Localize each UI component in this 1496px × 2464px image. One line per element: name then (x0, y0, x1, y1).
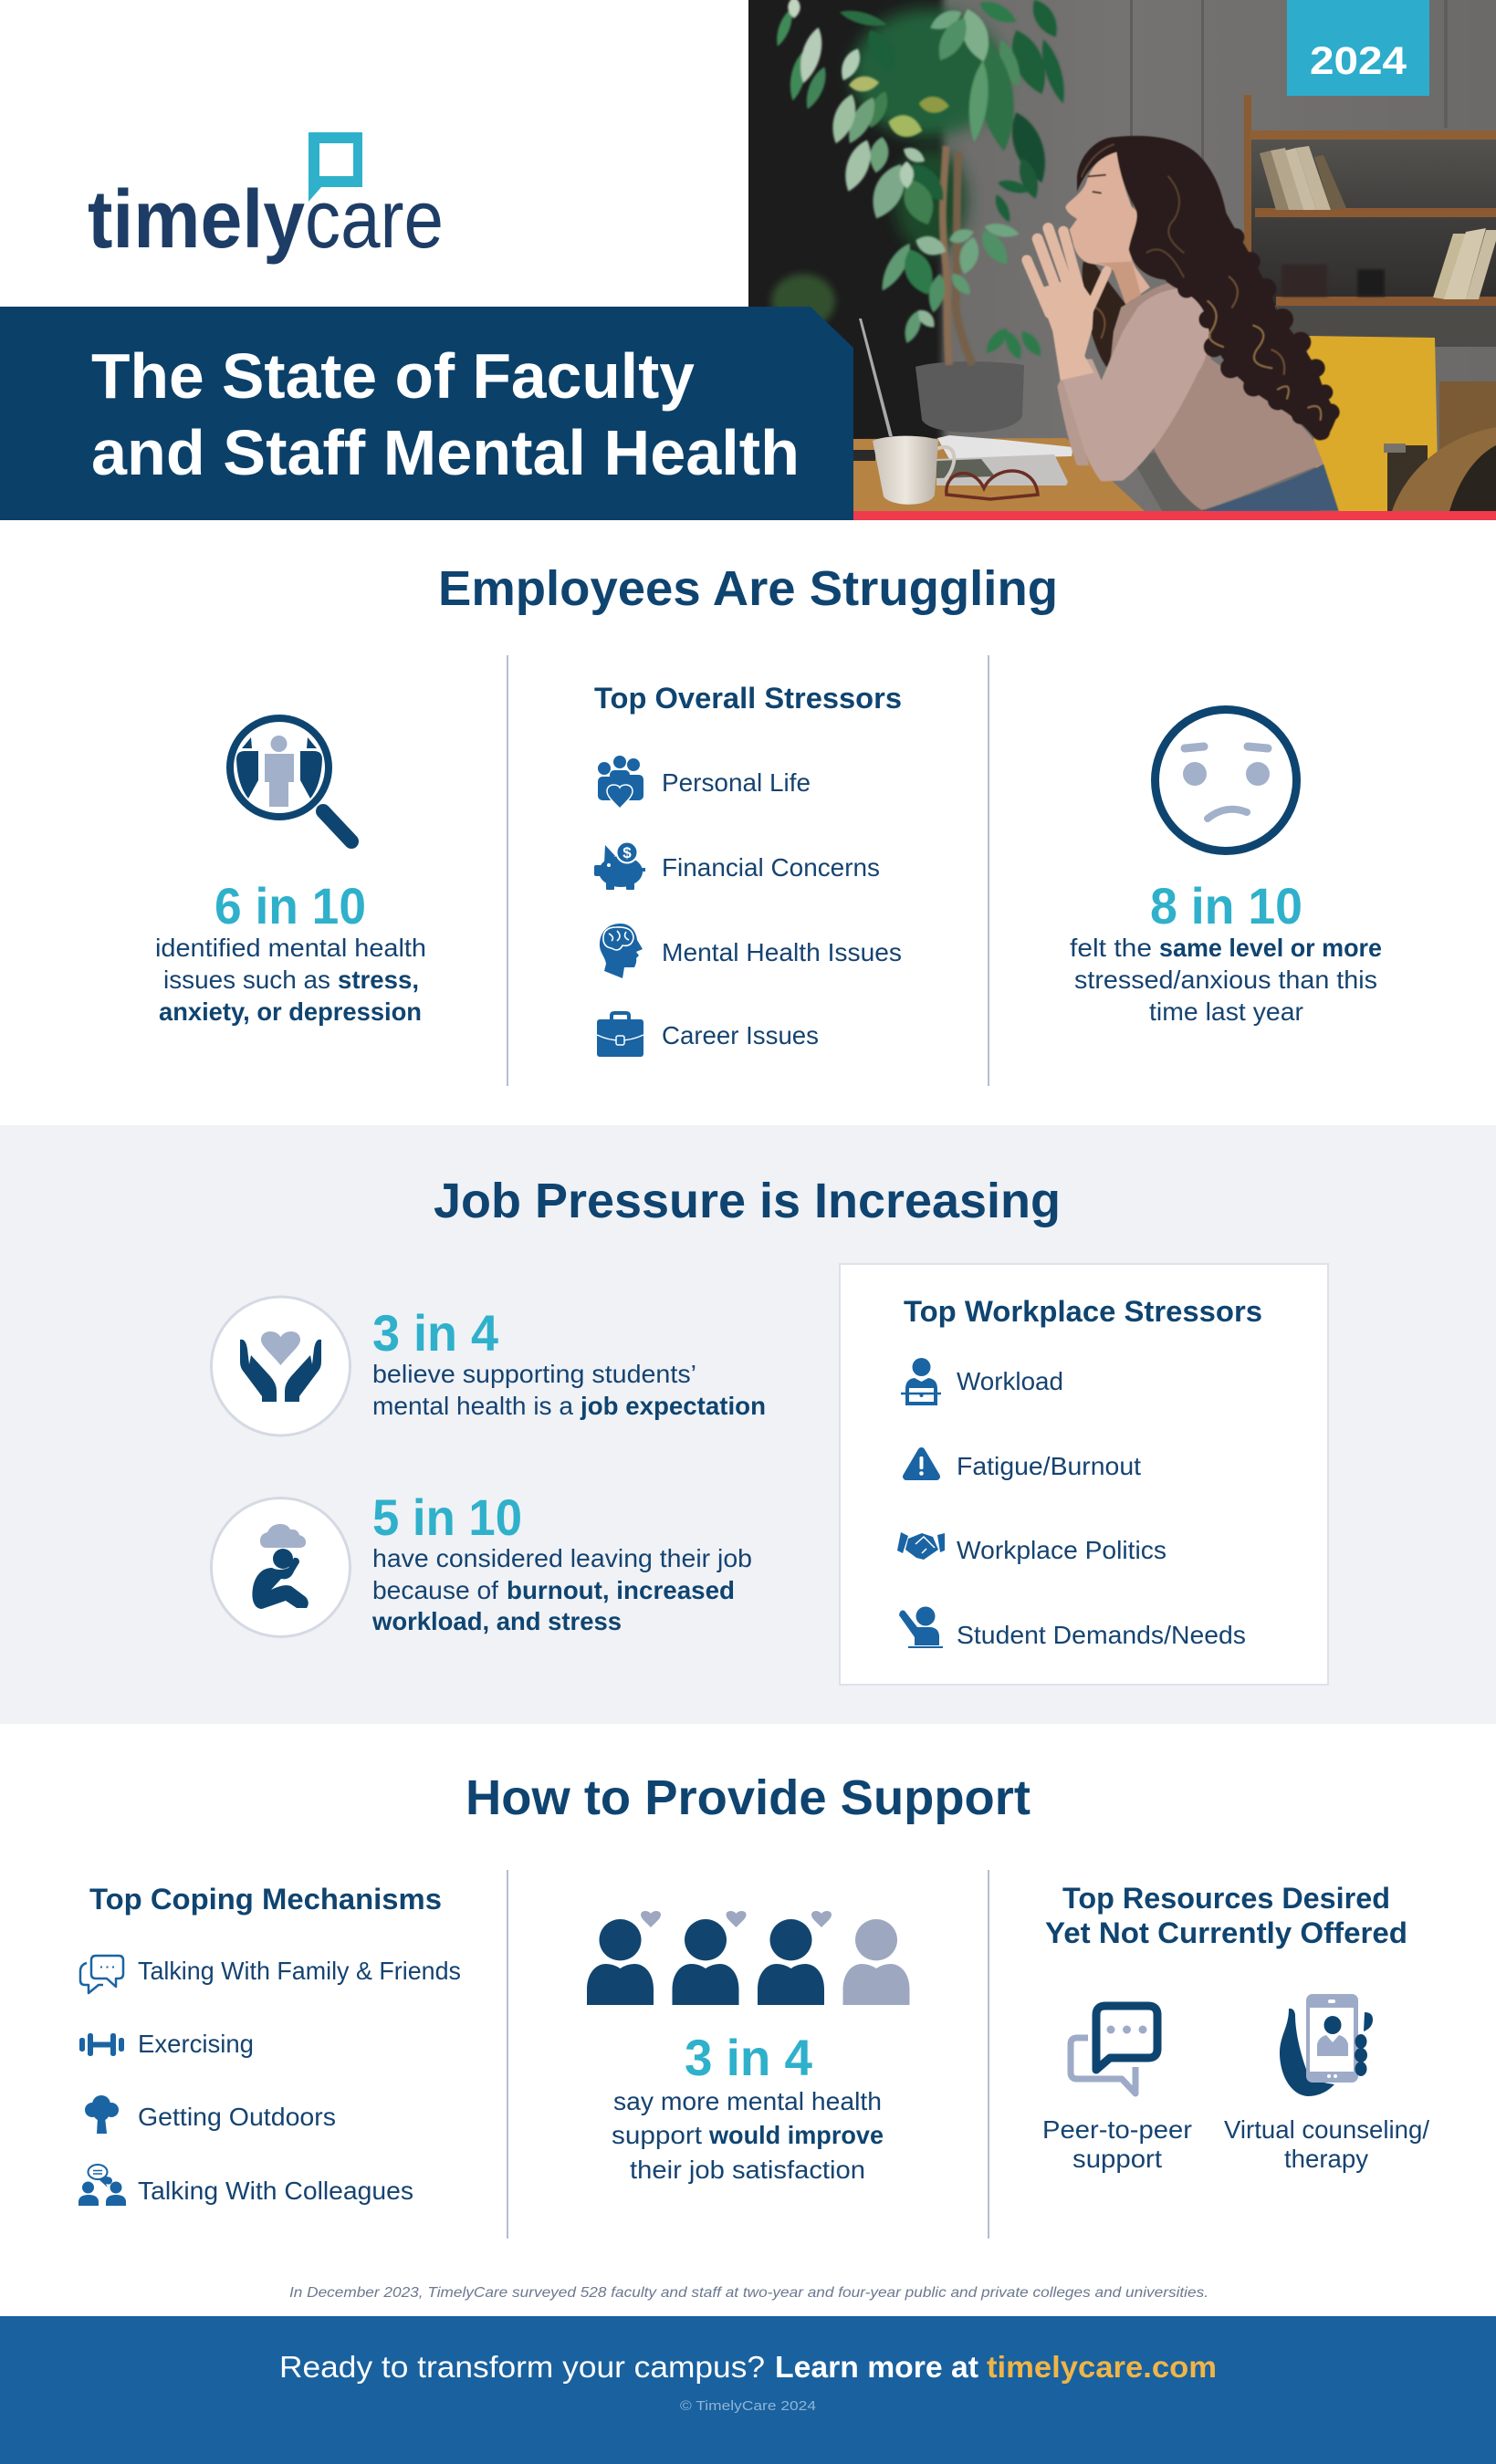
copyright: © TimelyCare 2024 (680, 2398, 816, 2414)
yellow chair and cabinet (1306, 336, 1496, 511)
icon: person under cloud (212, 1498, 350, 1637)
laptop (859, 318, 1073, 485)
icon: head with brain (600, 924, 643, 978)
panel: how to provide support (78, 1770, 1429, 2206)
label: student demands: Student Demands/Needs (957, 1621, 1246, 1649)
icon: worried face (1156, 710, 1296, 851)
card: top workplace stressors (840, 1264, 1328, 1685)
stat text: would improve (708, 2121, 884, 2149)
badge box (1287, 0, 1429, 96)
stat number: 5 in 10 (372, 1488, 522, 1546)
logo word: timely: timely (88, 174, 305, 266)
panel: employees are struggling (155, 561, 1382, 1057)
plant (772, 0, 1071, 365)
stat: 5 in 10 considered leaving (212, 1488, 752, 1637)
icon: handshake (897, 1532, 945, 1560)
label: personal life: Personal Life (662, 768, 811, 797)
plant pot (915, 361, 1024, 433)
stat text: have considered leaving their job (372, 1544, 752, 1572)
badge year: 2024 (1310, 39, 1407, 83)
stat text: anxiety, or depression (159, 997, 422, 1026)
list heading: Top Coping Mechanisms (89, 1883, 442, 1916)
icon: briefcase (597, 1013, 643, 1057)
call to action bold: Learn more at (775, 2350, 978, 2384)
year badge (1287, 0, 1429, 96)
icon: magnifier over people (230, 718, 351, 841)
section heading: How to Provide Support (466, 1770, 1030, 1825)
label: support: support (1072, 2145, 1162, 2173)
stat text: workload, and stress (371, 1607, 622, 1635)
mug (873, 436, 954, 505)
top resources desired (1042, 1882, 1429, 2173)
label: getting outdoors: Getting Outdoors (138, 2103, 336, 2131)
website link: timelycare.com (987, 2350, 1217, 2384)
label: peer-to-peer: Peer-to-peer (1042, 2115, 1192, 2144)
banner shape (0, 307, 853, 520)
label: mental health issues: Mental Health Issues (662, 938, 902, 966)
stat text: stress, (338, 966, 419, 994)
label: exercising: Exercising (138, 2030, 254, 2058)
stat text: support (612, 2121, 702, 2149)
stat number: 6 in 10 (214, 877, 366, 934)
footer background (0, 2316, 1496, 2464)
icon: hands holding heart (212, 1297, 350, 1436)
title line 2: and Staff Mental Health (91, 417, 800, 488)
stat text: burnout, increased (507, 1576, 735, 1604)
icon: four people with hearts (587, 1911, 909, 2005)
icon: piggy bank (594, 841, 645, 890)
icon: workload (901, 1358, 941, 1405)
stat text: because of (372, 1576, 498, 1604)
icon: personal life (598, 756, 643, 809)
hair (1077, 136, 1340, 440)
stat text: say more mental health (613, 2087, 882, 2115)
footer (0, 2316, 1496, 2464)
heading line 1: Top Resources Desired (1062, 1882, 1390, 1915)
label: workplace politics: Workplace Politics (957, 1536, 1166, 1564)
hands (1027, 228, 1107, 317)
section heading: Job Pressure is Increasing (434, 1174, 1061, 1228)
icon: dumbbell (79, 2033, 124, 2056)
call to action lead: Ready to transform your campus? (279, 2350, 765, 2384)
icon: piggy bank: $ (622, 844, 632, 861)
icon: warning triangle (906, 1451, 936, 1477)
stat text (371, 1544, 752, 1635)
label: career issues: Career Issues (662, 1021, 819, 1049)
glasses (947, 471, 1038, 499)
heading line 2: Yet Not Currently Offered (1045, 1916, 1407, 1949)
stat text: their job satisfaction (630, 2156, 865, 2184)
stat text: job expectation (580, 1392, 766, 1420)
icon: speech bubbles (80, 1956, 123, 1993)
header photo: woman at desk (712, 0, 1496, 529)
hair behind neck (1083, 262, 1125, 368)
stat number: 3 in 4 (372, 1304, 498, 1362)
stat text: stressed/anxious than this (1074, 966, 1377, 994)
stat text: issues such as (163, 966, 330, 994)
icon: colleagues talking (78, 2165, 126, 2206)
stat number: 3 in 4 (685, 2029, 812, 2086)
stat text: same level or more (1159, 934, 1382, 962)
label: fatigue/burnout: Fatigue/Burnout (957, 1452, 1141, 1480)
label: talking with family: Talking With Family & Friends (138, 1957, 461, 1985)
icon: student with raised hand (899, 1606, 943, 1647)
red band (853, 511, 1496, 520)
label: workload: Workload (957, 1367, 1063, 1395)
sleeve (1062, 288, 1208, 481)
panel: job pressure is increasing (0, 1125, 1496, 1724)
title line 1: The State of Faculty (91, 340, 695, 412)
desk (853, 438, 1145, 511)
stat: 3 in 4 job expectation (212, 1297, 766, 1436)
stat text (612, 2087, 884, 2184)
logo word: care: care (305, 174, 444, 266)
stat: 3 in 4 job satisfaction (587, 1911, 909, 2184)
label: talking with colleagues: Talking With Colleagues (138, 2177, 413, 2205)
face and neck (1065, 152, 1150, 304)
top coping mechanisms list (78, 1883, 461, 2206)
icon: peer-to-peer bubbles (1071, 2006, 1157, 2093)
stat number: 8 in 10 (1150, 877, 1302, 934)
woman (1027, 136, 1340, 511)
stat text (372, 1360, 766, 1420)
title banner (0, 307, 853, 520)
stat text: mental health is a (372, 1392, 574, 1420)
stat text (155, 934, 426, 1026)
torso (1107, 283, 1323, 510)
jeans (1202, 464, 1339, 511)
stat: 6 in 10 (155, 718, 426, 1026)
label: financial concerns: Financial Concerns (662, 853, 880, 882)
card box (840, 1264, 1328, 1685)
list heading: Top Overall Stressors (594, 682, 902, 715)
label: virtual counseling: Virtual counseling/ (1224, 2115, 1429, 2144)
stat text: time last year (1149, 997, 1303, 1026)
label: therapy: therapy (1284, 2145, 1368, 2173)
card heading: Top Workplace Stressors (904, 1295, 1262, 1328)
top overall stressors list (594, 682, 902, 1057)
stat text: felt the (1070, 934, 1152, 962)
icon: tree (85, 2095, 119, 2134)
stat text (1070, 934, 1382, 1026)
survey footnote: In December 2023, TimelyCare surveyed 528 faculty and staff at two-year and four-year public and private colleges and universities. (289, 2285, 1208, 2301)
stat text: believe supporting students’ (372, 1360, 696, 1388)
logo speech bubble (309, 132, 362, 202)
section background (0, 1125, 1496, 1724)
section heading: Employees Are Struggling (438, 561, 1058, 616)
shelf unit (1244, 95, 1496, 347)
icon: virtual therapy phone (1280, 1994, 1373, 2096)
logo: timelycare (88, 132, 444, 266)
stat: 8 in 10 (1070, 710, 1382, 1026)
stat text: identified mental health (155, 934, 426, 962)
